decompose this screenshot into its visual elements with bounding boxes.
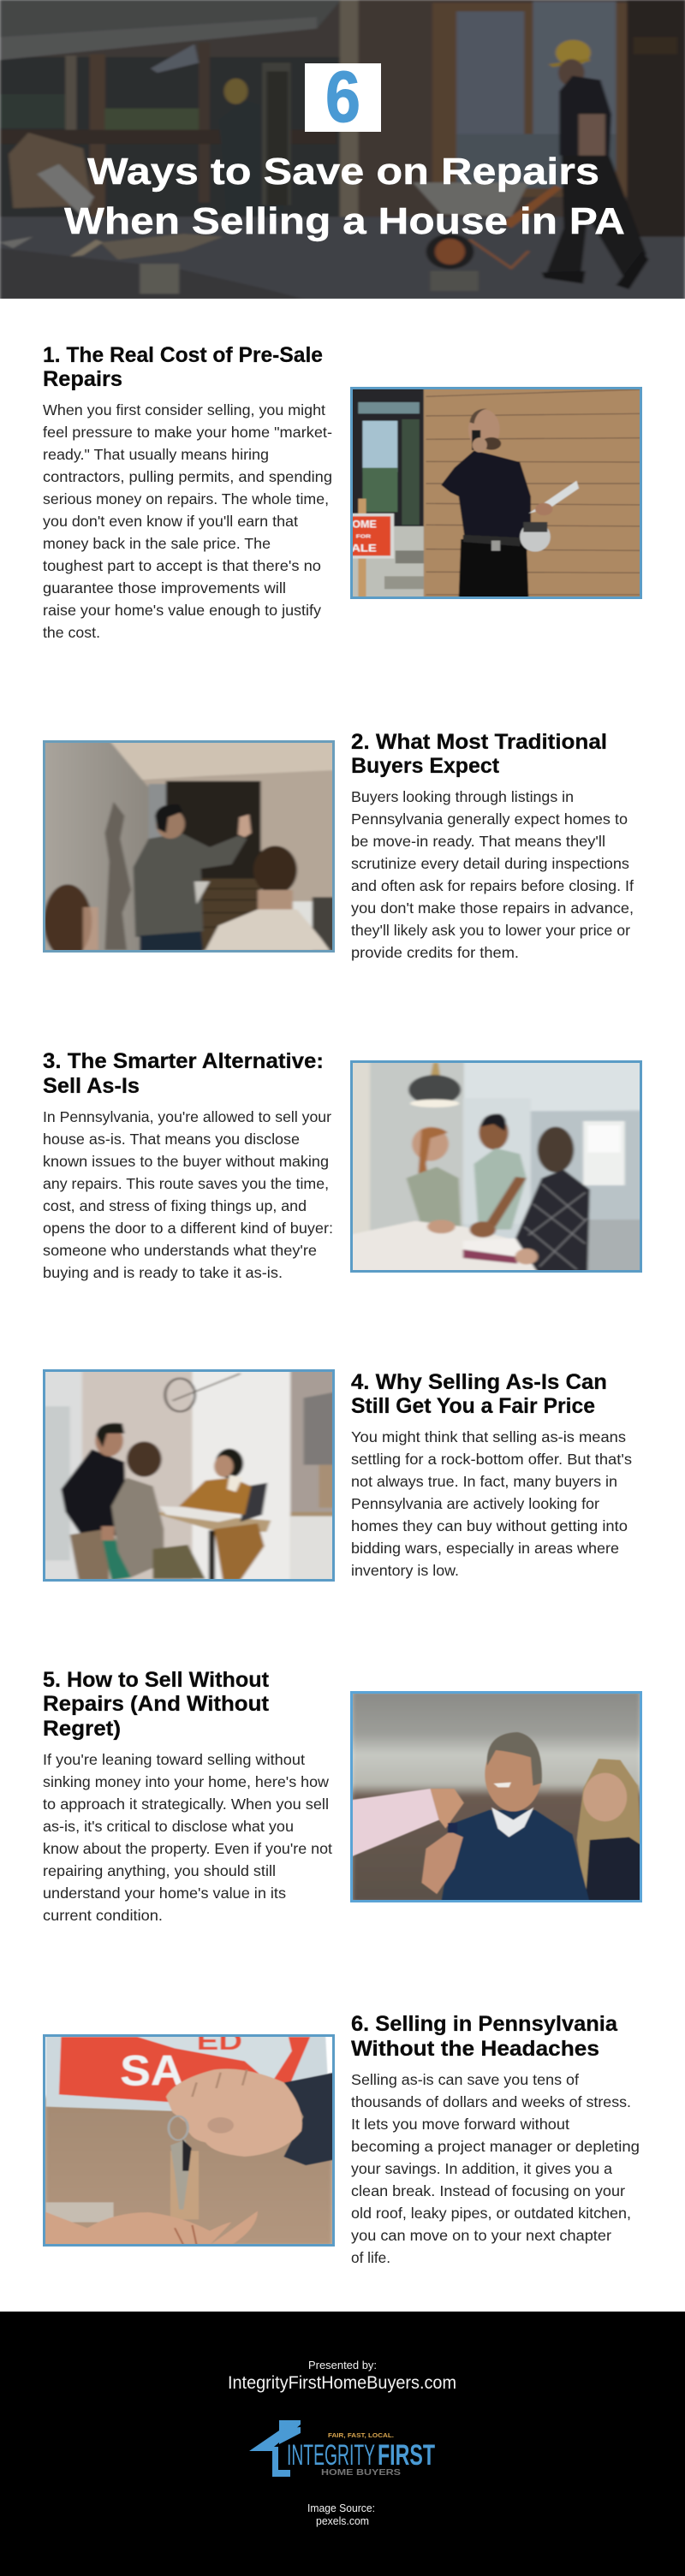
title: When Selling a House in PA	[64, 200, 625, 242]
text block 3: opens the door to a different kind of buyer:	[43, 1220, 333, 1237]
photo 6: hand passing keys in front of sold sign	[43, 2027, 335, 2247]
text block 1: guarantee those improvements will	[43, 579, 286, 597]
text block 3: known issues to the buyer without making	[43, 1153, 329, 1170]
photo 3: couple with agent at kitchen counter	[350, 1060, 642, 1273]
text block 2: be move-in ready. That means they'll	[351, 833, 605, 850]
heading 2: 2. What Most Traditional	[351, 730, 607, 754]
panel: section 5	[43, 1668, 642, 1924]
heading 5	[43, 1668, 270, 1741]
text block 6: It lets you move forward without	[351, 2116, 569, 2133]
text block 1	[43, 401, 332, 641]
text block 6: Selling as-is can save you tens of	[351, 2071, 579, 2088]
text block 6: thousands of dollars and weeks of stress.	[351, 2093, 631, 2110]
text block 6: clean break. Instead of focusing on your	[351, 2182, 625, 2199]
text block 4: Pennsylvania are actively looking for	[351, 1495, 599, 1512]
text block 1: contractors, pulling permits, and spending	[43, 468, 332, 485]
photo 2: agent showing a staircase to buyers	[43, 740, 335, 959]
photo 6: hand passing keys in front of sold sign: SA	[120, 2046, 183, 2094]
heading 6	[351, 2012, 618, 2061]
image source: Image Source:	[307, 2502, 375, 2514]
text block 6	[351, 2071, 640, 2266]
text block 2: provide credits for them.	[351, 944, 519, 961]
text block 2	[351, 788, 634, 961]
text block 2: you don't make those repairs in advance,	[351, 899, 634, 917]
photo 1: man on phone beside wood wall: OME	[352, 519, 377, 531]
photo 4: couple meeting agent at table	[43, 1369, 335, 1582]
text block 2: scrutinize every detail during inspections	[351, 855, 629, 872]
photo 1: man on phone beside wood wall: ALE	[351, 543, 377, 555]
text block 2: Buyers looking through listings in	[351, 788, 574, 805]
title	[64, 151, 625, 242]
text block 5: know about the property. Even if you're not	[43, 1840, 332, 1857]
logo: Integrity First Home Buyers: FAIR, FAST, LOCAL.	[328, 2431, 394, 2439]
heading 5: Regret)	[43, 1717, 121, 1741]
text block 1: raise your home's value enough to justify	[43, 602, 321, 619]
text block 5: to approach it strategically. When you sell	[43, 1795, 329, 1813]
heading 3: Sell As-Is	[43, 1074, 140, 1098]
logo: Integrity First Home Buyers: INTEGRITY	[287, 2439, 375, 2472]
text block 5: sinking money into your home, here's how	[43, 1773, 329, 1790]
text block 3: any repairs. This route saves you the time,	[43, 1175, 329, 1192]
text block 1: When you first consider selling, you might	[43, 401, 325, 418]
text block 3: cost, and stress of fixing things up, and	[43, 1197, 307, 1214]
heading 3	[43, 1049, 324, 1098]
website: IntegrityFirstHomeBuyers.com	[228, 2372, 456, 2393]
heading 2: Buyers Expect	[351, 754, 500, 778]
presented by: Presented by:	[308, 2359, 377, 2371]
photo 6: hand passing keys in front of sold sign: ED	[197, 2027, 242, 2056]
hero banner	[0, 0, 685, 300]
text block 2: and often ask for repairs before closing. If	[351, 877, 634, 894]
number badge	[305, 56, 381, 137]
text block 6: becoming a project manager or depleting	[351, 2138, 640, 2155]
text block 1: the cost.	[43, 624, 100, 641]
text block 3: someone who understands what they're	[43, 1242, 317, 1259]
text block 5: understand your home's value in its	[43, 1885, 286, 1902]
text block 4: settling for a rock-bottom offer. But that's	[351, 1451, 632, 1468]
photo 1: man on phone beside wood wall: FOR	[356, 534, 371, 539]
text block 5: current condition.	[43, 1907, 163, 1924]
text block 2: they'll likely ask you to lower your price or	[351, 922, 630, 939]
logo: Integrity First Home Buyers: FIRST	[378, 2439, 435, 2472]
text block 1: ready." That usually means hiring	[43, 446, 269, 463]
heading 1	[43, 343, 323, 391]
panel: section 2	[43, 730, 634, 961]
heading 4: 4. Why Selling As-Is Can	[351, 1370, 607, 1394]
text block 5: repairing anything, you should still	[43, 1862, 276, 1879]
text block 1: you don't even know if you'll earn that	[43, 513, 298, 530]
text block 4: bidding wars, especially in areas where	[351, 1540, 619, 1557]
text block 3	[43, 1108, 333, 1281]
panel: section 1	[43, 343, 642, 641]
heading 6: Without the Headaches	[351, 2037, 599, 2061]
number badge: 6	[325, 56, 360, 137]
text block 4: homes they can buy without getting into	[351, 1517, 628, 1534]
logo: Integrity First Home Buyers	[249, 2420, 435, 2478]
text block 4: inventory is low.	[351, 1562, 459, 1579]
photo 1: man on phone beside wood wall	[350, 387, 642, 599]
text block 3: house as-is. That means you disclose	[43, 1131, 300, 1148]
logo: Integrity First Home Buyers: HOME BUYERS	[321, 2468, 401, 2478]
image source	[307, 2502, 375, 2527]
text block 6: of life.	[351, 2249, 390, 2266]
text block 3: In Pennsylvania, you're allowed to sell your	[43, 1108, 331, 1125]
text block 5	[43, 1751, 332, 1924]
photo 5: smiling couple receiving keys	[350, 1691, 642, 1902]
text block 1: feel pressure to make your home "market-	[43, 424, 332, 441]
text block 6: old roof, leaky pipes, or outdated kitchen,	[351, 2205, 631, 2222]
text block 4	[351, 1428, 632, 1579]
heading 5: Repairs (And Without	[43, 1692, 270, 1716]
heading 1: 1. The Real Cost of Pre-Sale	[43, 343, 323, 367]
text block 1: toughest part to accept is that there's no	[43, 557, 321, 574]
panel: section 4	[43, 1369, 632, 1582]
heading 4: Still Get You a Fair Price	[351, 1394, 595, 1418]
footer	[0, 2312, 685, 2576]
text block 6: your savings. In addition, it gives you a	[351, 2160, 612, 2177]
title: Ways to Save on Repairs	[87, 151, 599, 193]
heading 1: Repairs	[43, 367, 122, 391]
text block 4: not always true. In fact, many buyers in	[351, 1473, 617, 1490]
panel: section 6	[43, 2012, 640, 2266]
heading 5: 5. How to Sell Without	[43, 1668, 270, 1692]
text block 1: serious money on repairs. The whole time,	[43, 490, 329, 507]
heading 3: 3. The Smarter Alternative:	[43, 1049, 324, 1073]
image source: pexels.com	[316, 2515, 369, 2527]
text block 4: You might think that selling as-is means	[351, 1428, 626, 1445]
panel: section 3	[43, 1049, 642, 1281]
text block 5: as-is, it's critical to disclose what you	[43, 1818, 294, 1835]
heading 2	[351, 730, 607, 778]
hero photo: construction site with worker and wheelbarrow	[0, 0, 685, 300]
heading 6: 6. Selling in Pennsylvania	[351, 2012, 618, 2036]
text block 6: you can move on to your next chapter	[351, 2227, 611, 2244]
text block 2: Pennsylvania generally expect homes to	[351, 810, 628, 828]
text block 5: If you're leaning toward selling without	[43, 1751, 305, 1768]
text block 1: money back in the sale price. The	[43, 535, 271, 552]
heading 4	[351, 1370, 607, 1418]
text block 3: buying and is ready to take it as-is.	[43, 1264, 283, 1281]
